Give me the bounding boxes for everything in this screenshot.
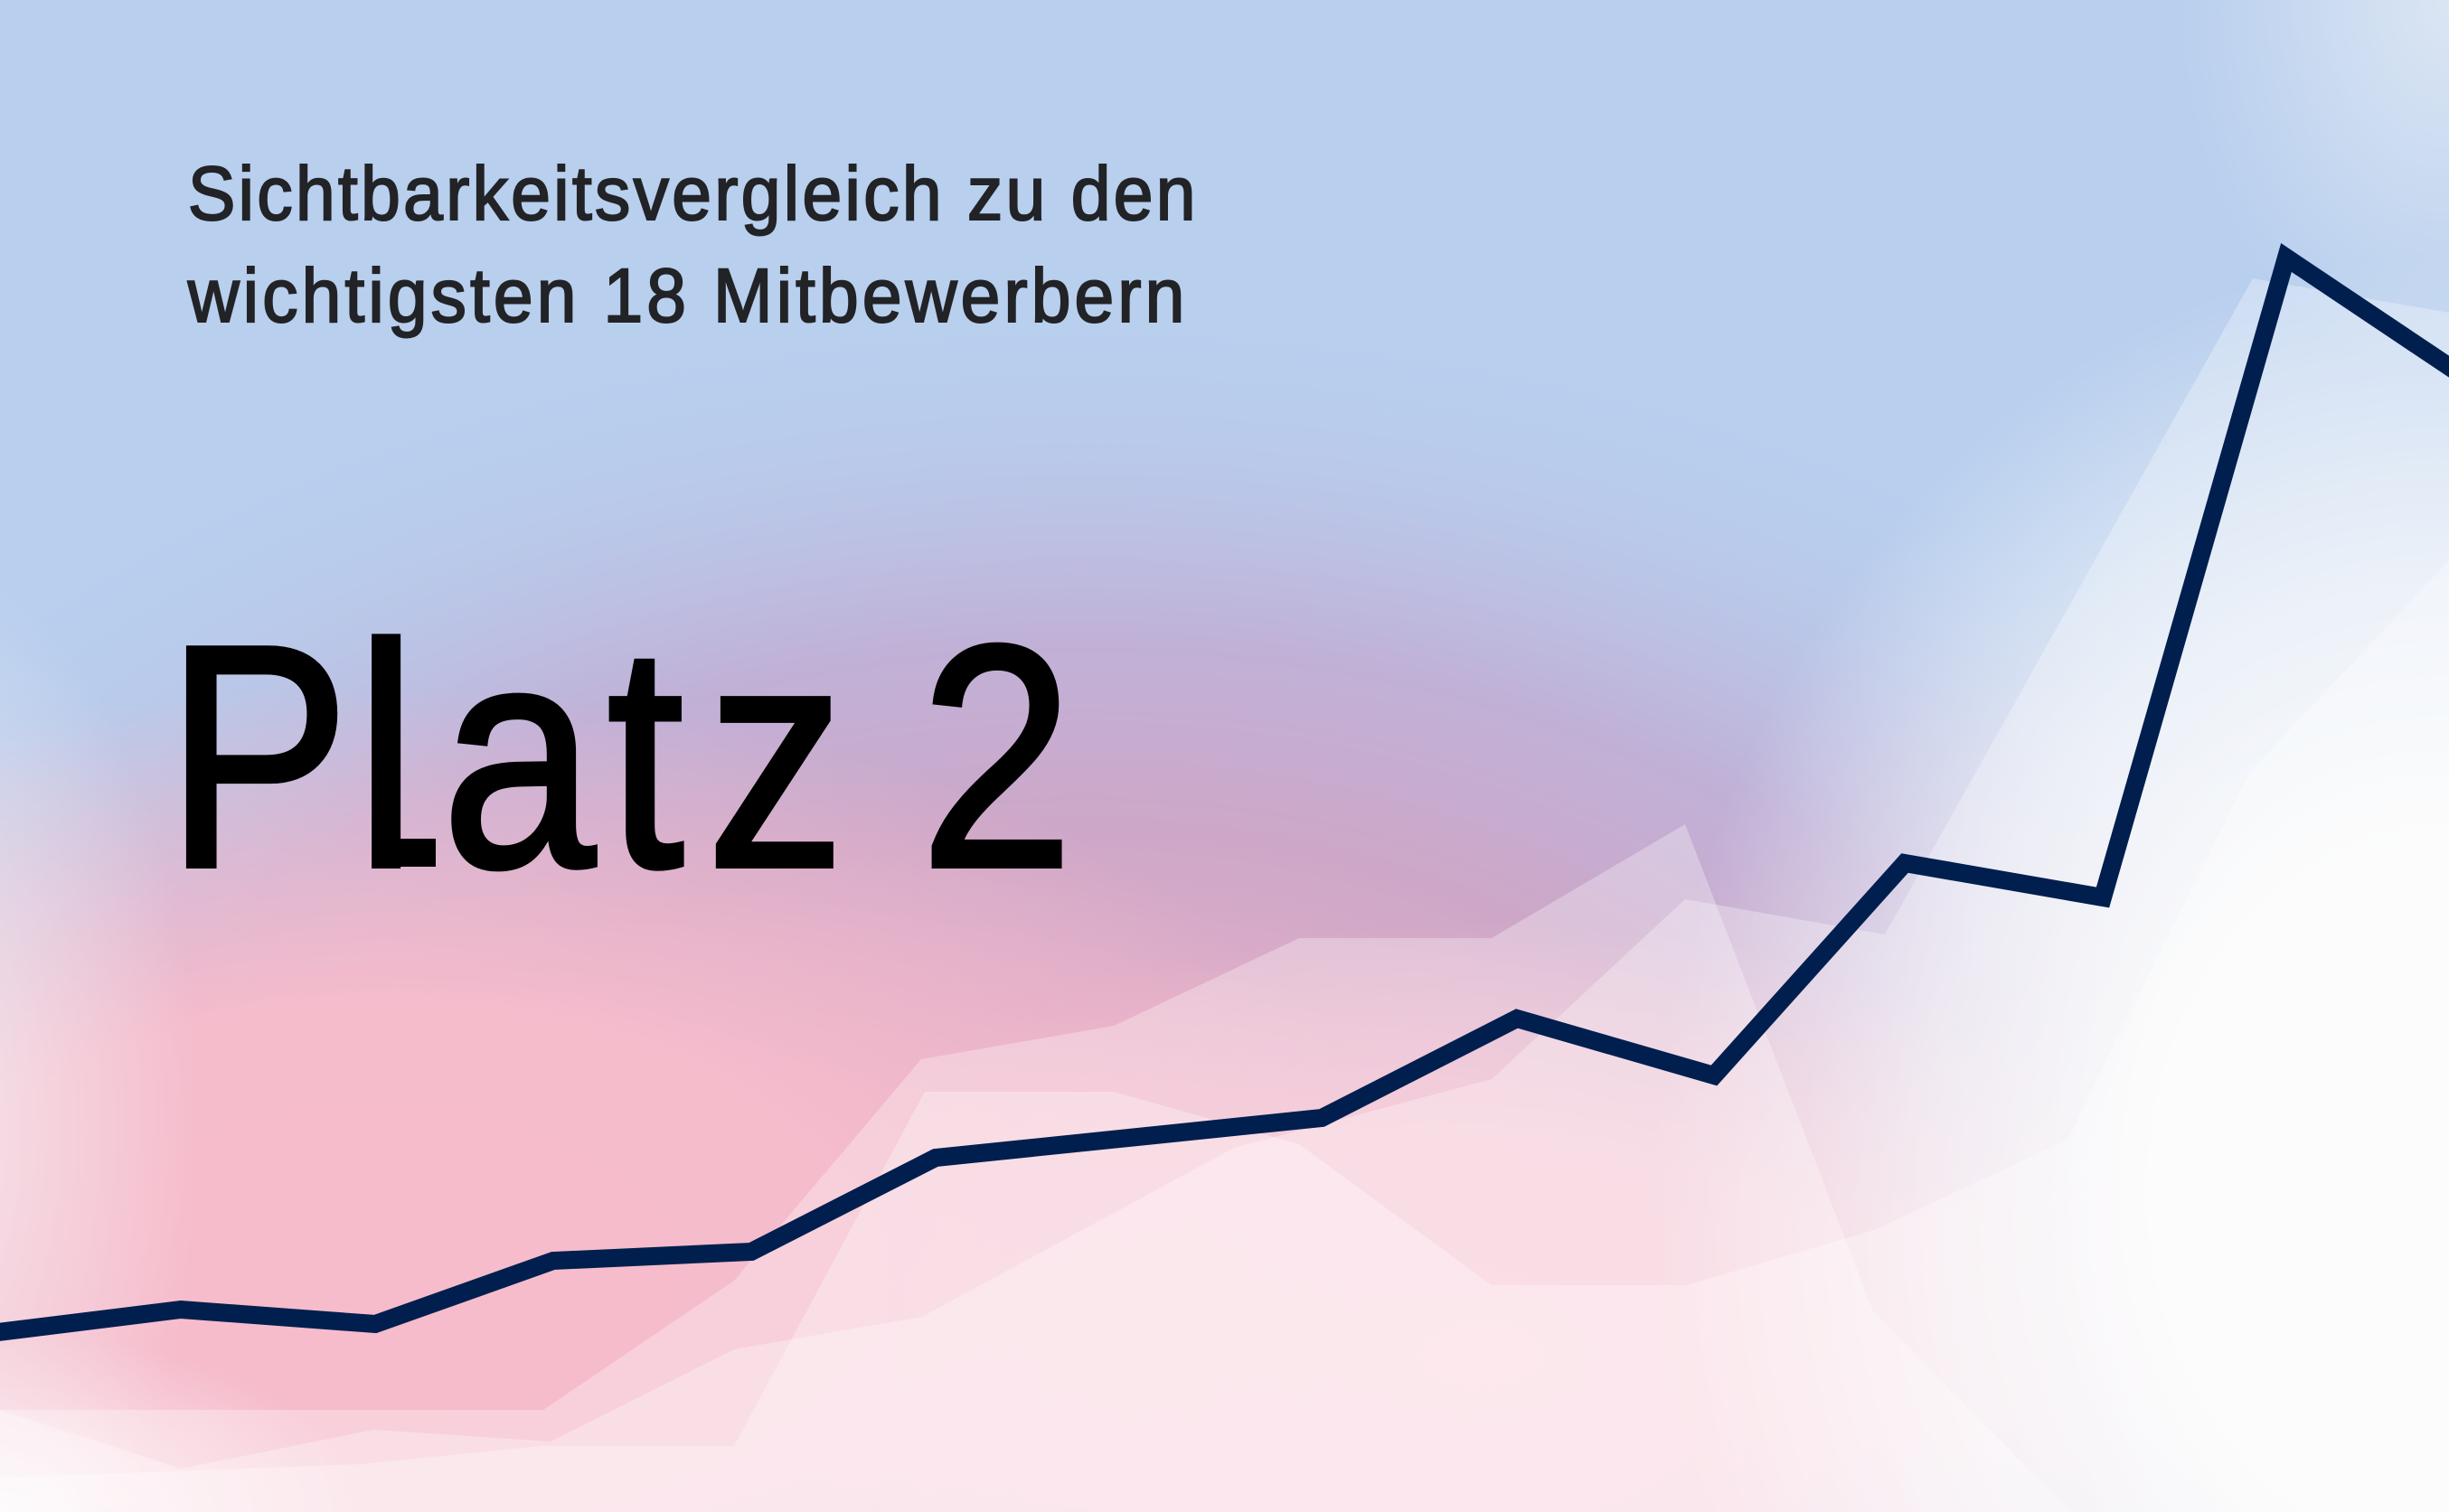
corner glow <box>0 1331 362 1512</box>
subtitle: wichtigsten 18 Mitbewerbern <box>187 254 1184 339</box>
area: competitor stepped <box>0 560 2449 1512</box>
area: competitor back peak <box>0 824 2070 1512</box>
main series line <box>0 258 2449 1333</box>
subtitle: Sichtbarkeitsvergleich zu den <box>188 152 1196 237</box>
title: Platz 2: Platz 2 <box>166 579 1073 934</box>
